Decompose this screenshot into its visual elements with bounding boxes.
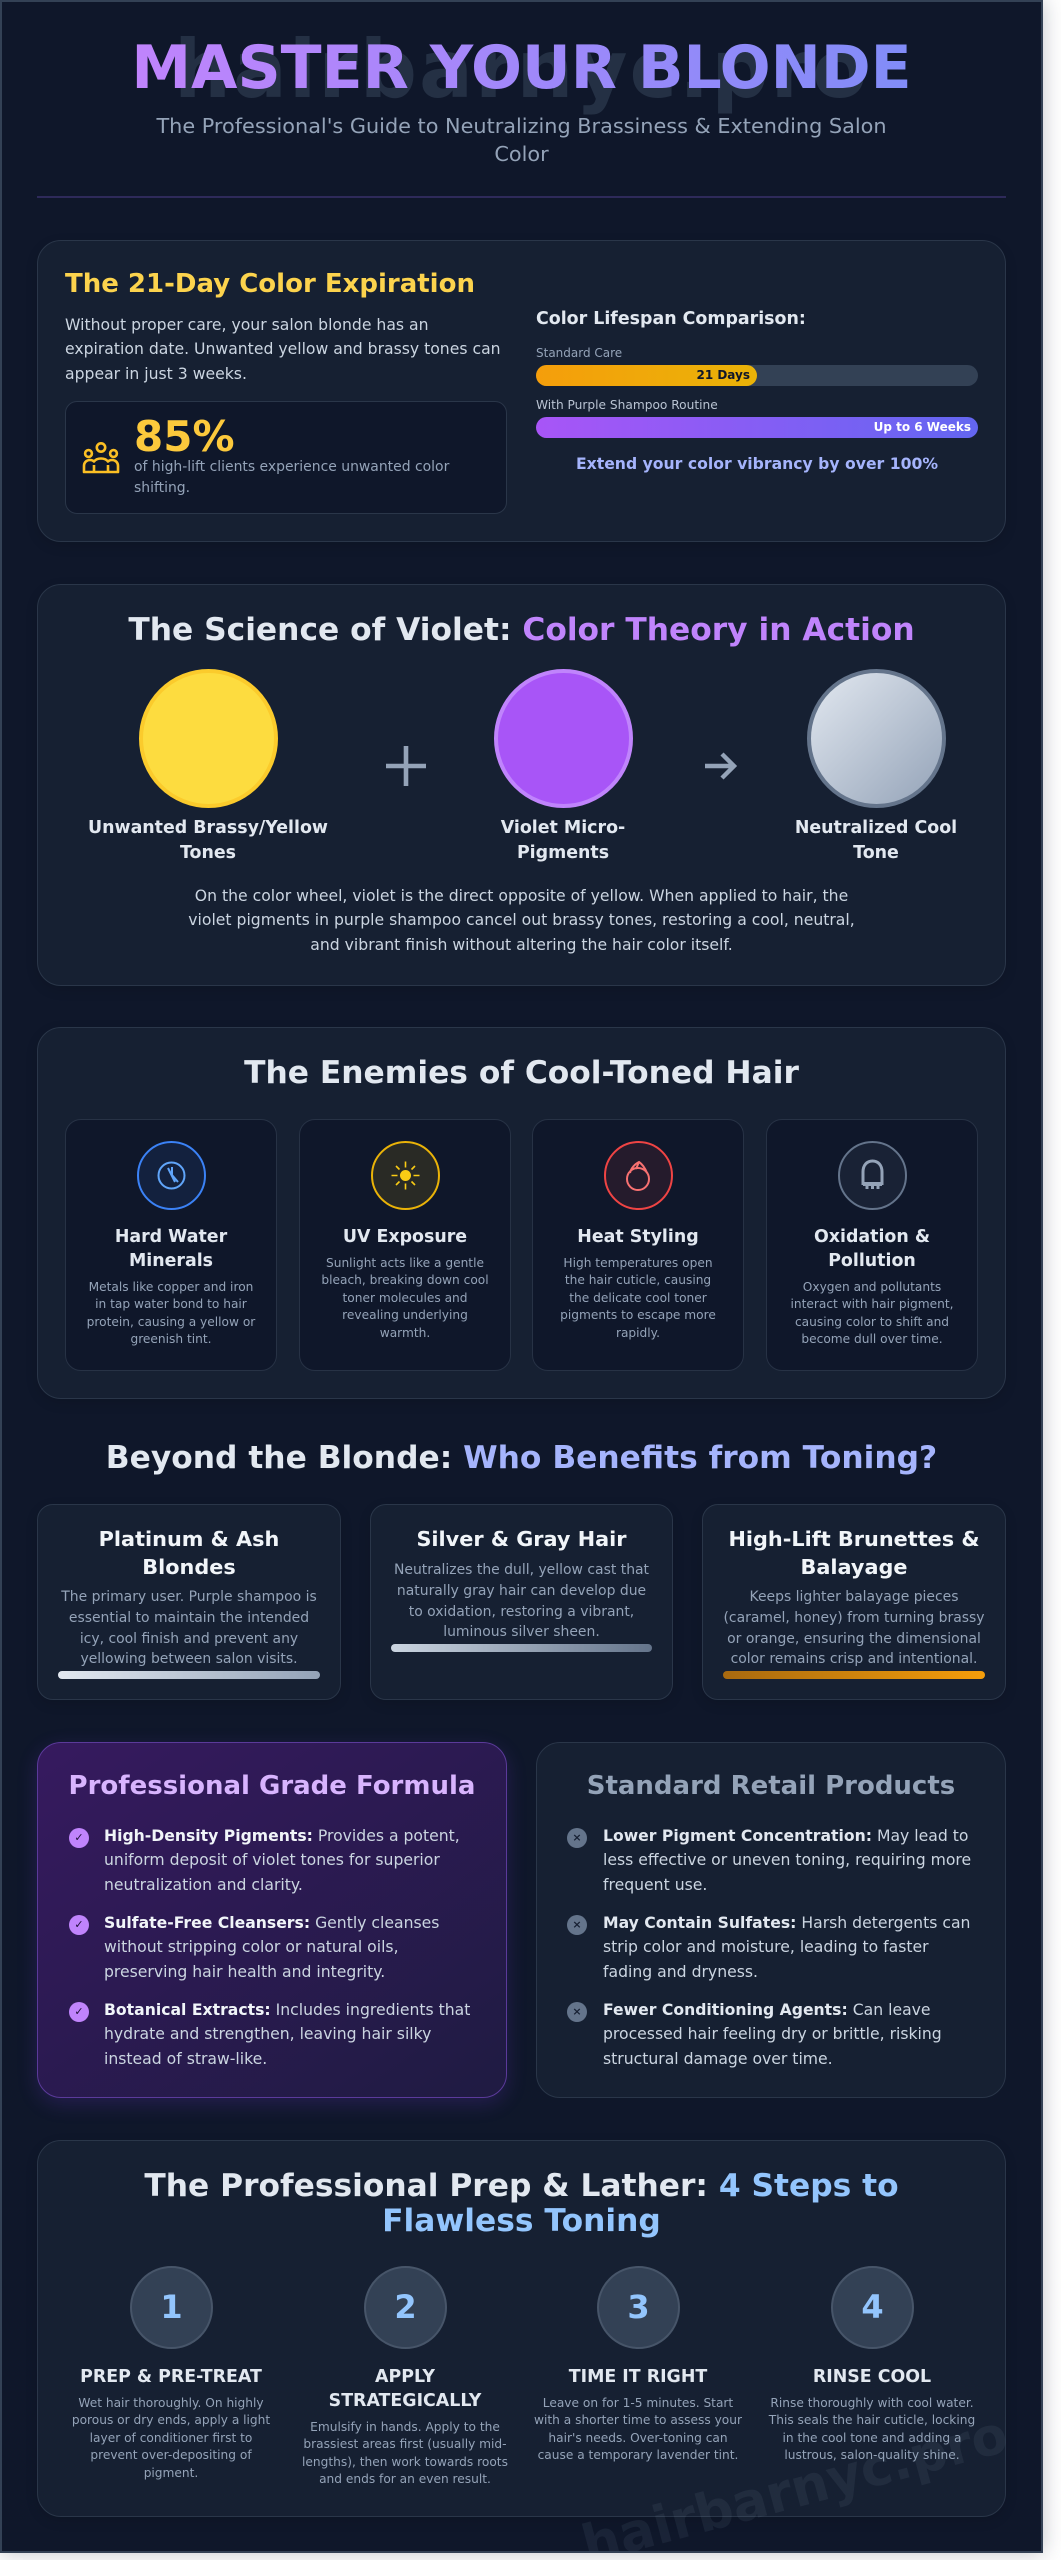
step 1 [72,2266,270,2480]
bar: purple shampoo up to 6 weeks [536,417,978,438]
description: Metals like copper and iron [89,1280,253,1294]
icon: cross: × [572,1831,582,1844]
description: causing color to shift and [795,1315,949,1329]
description: Neutralizes the dull, yellow cast that [394,1562,649,1578]
title: Heat Styling [577,1227,699,1247]
title: STRATEGICALLY [329,2391,481,2411]
description: essential to maintain the intended [69,1610,309,1626]
title: Silver & Gray Hair [416,1527,627,1551]
watermark: top: hairbarnyc.pro [174,23,869,116]
subtitle: The Professional's Guide to Neutralizing Brassiness & Extending Salon [156,114,887,138]
text: color theory explanation [188,886,855,954]
description [394,1562,649,1640]
text: fading and dryness. [603,1962,758,1981]
description: icy, cool finish and prevent any [80,1631,298,1647]
description: Wet hair thoroughly. On highly [78,2396,264,2410]
circle: neutral [807,669,946,808]
title [814,1227,930,1271]
description: hair's needs. Over-toning can [548,2431,728,2445]
icon: arrow [705,752,737,780]
description: prevent over-depositing of [90,2448,252,2462]
icon: cross [567,1828,587,1848]
title: Minerals [129,1251,213,1271]
description: and ends for an even result. [319,2472,491,2486]
description: cause a temporary lavender tint. [538,2448,738,2462]
swatch bar [58,1671,320,1679]
heading: four steps: The Professional Prep & Lather: 4 Steps to [144,2168,899,2204]
description: color remains crisp and intentional. [731,1651,977,1667]
label: standard care: Standard Care [536,346,622,360]
panel: science of violet [37,584,1006,986]
title [99,1527,279,1579]
icon: check: ✓ [74,2005,84,2018]
stat box: 85 percent [65,401,507,514]
description: High temperatures open [563,1256,713,1270]
swatch bar [723,1671,985,1679]
text [603,1826,971,1894]
description [532,2395,744,2465]
heading: enemies: The Enemies of Cool-Toned Hair [244,1055,799,1091]
description: with a shorter time to assess your [534,2413,742,2427]
description: become dull over time. [801,1332,943,1346]
number circle [364,2266,447,2349]
icon: cross [567,1915,587,1935]
label: neutralized: Neutralized Cool [795,818,957,838]
subtitle: Color [494,142,549,166]
item: sulfate-free cleansers [69,1913,439,1981]
icon: people group [82,442,120,474]
text: color theory explanation: violet pigments in purple shampoo cancel out brassy tones, restoring a cool, neutral, [188,910,855,929]
description: porous or dry ends, apply a light [72,2413,270,2427]
icon: check [69,2002,89,2022]
title: Pollution [828,1251,916,1271]
text: uniform deposit of violet tones for superior [104,1850,440,1869]
description: brassiest areas first (usually mid- [303,2437,507,2451]
icon: pollution [838,1141,907,1210]
bar: standard care 21 days: 21 Days [696,368,750,382]
description: pigment. [144,2466,198,2480]
step 2 [302,2266,508,2486]
number circle: 1 [160,2288,183,2326]
icon: hard water [137,1141,206,1210]
title: APPLY [375,2367,435,2387]
description [723,1589,985,1667]
description: The primary user. Purple shampoo is [61,1589,317,1605]
number circle [597,2266,680,2349]
card: uv exposure [299,1119,511,1371]
number circle [130,2266,213,2349]
text: Fewer Conditioning Agents: Can leave [603,2000,931,2019]
description: Rinse thoroughly with cool water. [770,2396,974,2410]
icon: check [69,1828,89,1848]
title: Oxidation & [814,1227,930,1247]
icon: check: ✓ [74,1918,84,1931]
icon: check [69,1915,89,1935]
heading: four steps: Flawless Toning [382,2203,661,2239]
heading: lifespan comparison: Color Lifespan Comparison: [536,309,806,329]
text [104,1913,439,1981]
description [766,2395,978,2465]
description: yellowing between salon visits. [80,1651,298,1667]
panel: enemies of cool-toned hair [37,1027,1006,1399]
text [603,1913,970,1981]
description: Sunlight acts like a gentle [326,1256,484,1270]
title: MASTER YOUR BLONDE [131,33,912,103]
stat text [134,459,450,496]
title: High-Lift Brunettes & [728,1527,980,1551]
description: the hair cuticle, causing [565,1273,711,1287]
subtitle [156,114,887,166]
panel: standard retail products [536,1742,1006,2098]
icon: heat [604,1141,673,1210]
stat text: shifting. [134,480,190,496]
description: Oxygen and pollutants [803,1280,941,1294]
description: layer of conditioner first to [90,2431,252,2445]
title: Hard Water [115,1227,227,1247]
description: rapidly. [616,1326,660,1340]
text: preserving hair health and integrity. [104,1962,385,1981]
description: Emulsify in hands. Apply to the [310,2420,500,2434]
card: high-lift brunettes [702,1504,1006,1700]
item: botanical extracts [69,2000,470,2068]
card: heat styling [532,1119,744,1371]
text [104,1826,460,1894]
label: violet pigments: Pigments [517,843,609,863]
text: color theory explanation: On the color wheel, violet is the direct opposite of yellow. When applied to hair, the [195,886,848,905]
text: High-Density Pigments: Provides a potent, [104,1826,460,1845]
bar: purple shampoo up to 6 weeks: Up to 6 Weeks [874,420,971,434]
circle: violet [494,669,633,808]
title: Balayage [800,1555,908,1579]
icon: plus [386,746,426,786]
title: RINSE COOL [813,2367,931,2387]
title: TIME IT RIGHT [569,2367,707,2387]
panel: prep and lather steps [37,2140,1006,2517]
text [603,2000,942,2068]
description [321,1256,489,1340]
text: May Contain Sulfates: Harsh detergents can [603,1913,970,1932]
text: color theory explanation: and vibrant finish without altering the hair color itself. [310,935,733,954]
text: instead of straw-like. [104,2049,267,2068]
heading: four steps [144,2168,899,2239]
label: neutralized: Tone [853,843,899,863]
text [104,2000,470,2068]
icon: cross: × [572,2005,582,2018]
text: Sulfate-Free Cleansers: Gently cleanses [104,1913,439,1932]
text: without stripping color or natural oils, [104,1937,399,1956]
description [87,1280,256,1346]
description [790,1280,954,1346]
circle: yellow [139,669,278,808]
text: expiration description: Without proper care, your salon blonde has an [65,315,429,334]
number circle: 2 [394,2288,417,2326]
description: warmth. [380,1326,430,1340]
text: frequent use. [603,1875,707,1894]
description: toner molecules and [342,1291,468,1305]
description [72,2396,270,2480]
text: processed hair feeling dry or brittle, risking [603,2024,942,2043]
description: in the cool tone and adding a [782,2431,962,2445]
stat text: of high-lift clients experience unwanted color [134,459,449,475]
description: Leave on for 1-5 minutes. Start [543,2396,733,2410]
description: lustrous, salon-quality shine. [784,2448,960,2462]
label: brassy tones: Tones [180,843,236,863]
item: may contain sulfates [567,1913,970,1981]
title [299,2365,511,2413]
description: greenish tint. [130,1332,212,1346]
text: Botanical Extracts: Includes ingredients that [104,2000,470,2019]
title: PREP & PRE-TREAT [80,2367,262,2387]
description: naturally gray hair can develop due [397,1583,646,1599]
heading: science of violet: The Science of Violet: Color Theory in Action [128,612,915,648]
card: platinum and ash [37,1504,341,1700]
heading: beyond the blonde: Beyond the Blonde: Who Benefits from Toning? [106,1440,937,1476]
panel: 21-day color expiration [37,240,1006,542]
description: pigments to escape more [560,1308,716,1322]
swatch bar [391,1644,652,1652]
description: This seals the hair cuticle, locking [769,2413,975,2427]
callout: extend vibrancy: Extend your color vibrancy by over 100% [576,454,938,473]
text: expiration description: expiration date. Unwanted yellow and brassy tones can [65,339,501,358]
description [61,1589,317,1667]
icon: sun [371,1141,440,1210]
heading: Standard Retail Products [587,1771,955,1801]
text: structural damage over time. [603,2049,833,2068]
card: silver and gray [370,1504,673,1700]
panel: professional grade formula [37,1742,507,2098]
text: hydrate and strengthen, leaving hair silky [104,2024,431,2043]
heading: Professional Grade Formula [69,1771,475,1801]
title: Blondes [142,1555,236,1579]
icon: cross [567,2002,587,2022]
text: expiration description: appear in just 3 weeks. [65,364,247,383]
number circle: 3 [627,2288,650,2326]
number circle [831,2266,914,2349]
description: in tap water bond to hair [95,1297,247,1311]
title: UV Exposure [343,1227,467,1247]
bar: standard care 21 days [536,365,978,386]
title: Platinum & Ash [99,1527,279,1551]
label: with purple shampoo: With Purple Shampoo Routine [536,398,718,412]
text: neutralization and clarity. [104,1875,303,1894]
title [115,1227,228,1271]
description [299,2419,511,2489]
item: lower pigment concentration [567,1826,971,1894]
heading: 21-day color expiration: The 21-Day Color Expiration [65,269,475,299]
card: hard water [65,1119,277,1371]
description: to oxidation, restoring a vibrant, [409,1604,634,1620]
label: violet pigments [500,818,625,863]
text: strip color and moisture, leading to faster [603,1937,929,1956]
card: oxidation and pollution [766,1119,978,1371]
stat number: 85% [134,412,235,461]
description: bleach, breaking down cool [321,1273,489,1287]
title [728,1527,980,1579]
description: protein, causing a yellow or [87,1315,255,1329]
item: high-density pigments [69,1826,460,1894]
step 4 [766,2266,978,2496]
description: luminous silver sheen. [443,1624,600,1640]
number circle: 4 [861,2288,884,2326]
label: violet pigments: Violet Micro- [501,818,625,838]
description: the delicate cool toner [569,1291,707,1305]
description: revealing underlying [342,1308,468,1322]
label: brassy tones: Unwanted Brassy/Yellow [88,818,328,838]
item: fewer conditioning agents [567,2000,942,2068]
description [560,1256,716,1340]
text: less effective or uneven toning, requiring more [603,1850,971,1869]
icon: cross: × [572,1918,582,1931]
text: Lower Pigment Concentration: May lead to [603,1826,968,1845]
description: (caramel, honey) from turning brassy [723,1610,985,1626]
step 3 [532,2266,744,2496]
label: neutralized [795,818,957,863]
text: expiration description [65,315,501,383]
description: Keeps lighter balayage pieces [750,1589,958,1605]
label: brassy tones [88,818,328,863]
icon: check: ✓ [74,1831,84,1844]
description: interact with hair pigment, [790,1297,954,1311]
description: or orange, ensuring the dimensional [727,1631,981,1647]
description: lengths), then work towards roots [302,2455,508,2469]
